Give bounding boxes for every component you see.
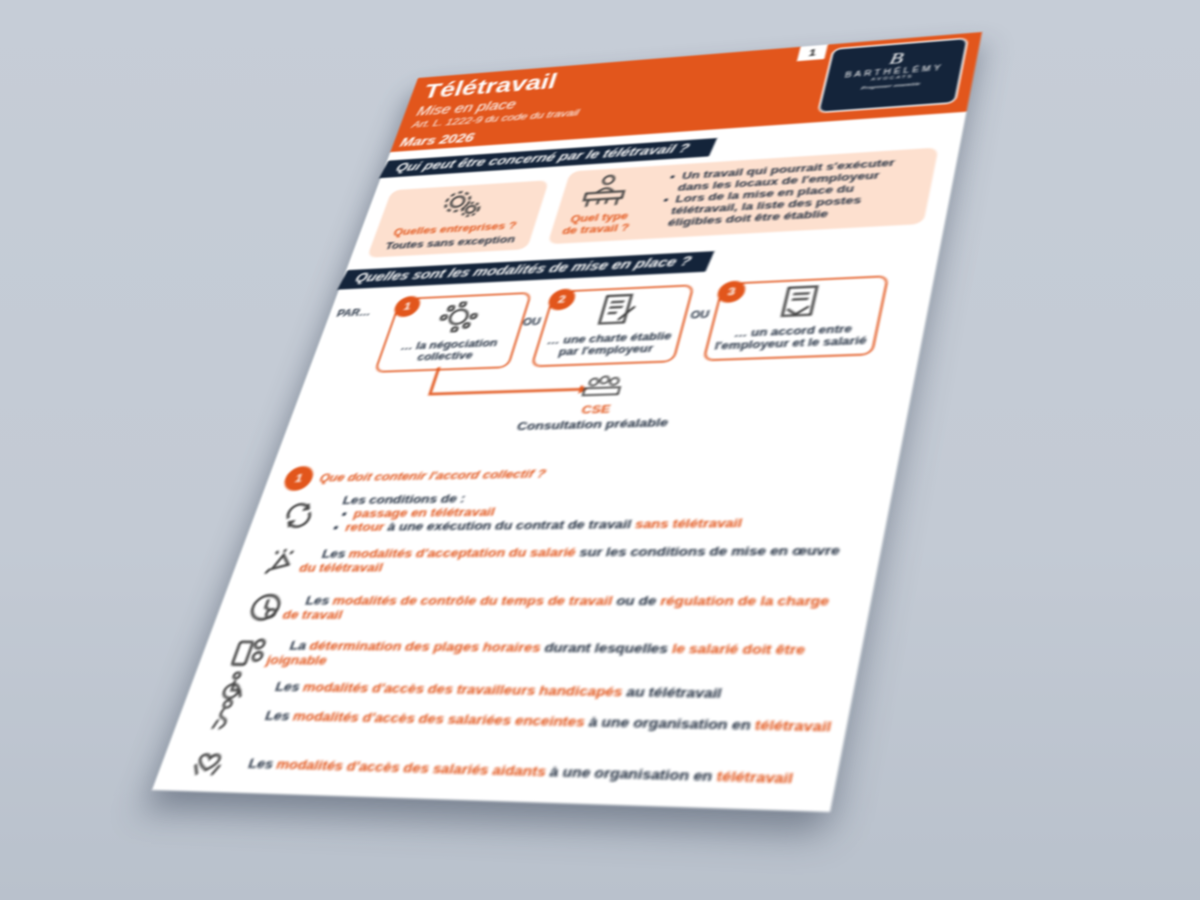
box 1: negociation collective: collective <box>416 349 475 363</box>
item: aidants <box>192 698 795 787</box>
item: conditions <box>284 491 744 534</box>
label: OU 1: OU <box>521 316 542 328</box>
logo <box>817 37 969 113</box>
icon: CSE group <box>580 374 623 398</box>
box 2: charte employeur <box>530 284 695 367</box>
panel: quel type de travail: • Un travail qui pourrait s'exécuter <box>669 156 896 182</box>
box 2: charte employeur: 2 <box>557 293 567 305</box>
logo: Progresser ensemble <box>860 81 921 91</box>
section heading: accord collectif: 1 <box>293 471 305 485</box>
section heading: accord collectif: Que doit contenir l'accord collectif ? <box>318 467 548 484</box>
item: plages horaires: La détermination des plages horaires durant lesquelles le salarié doit être joignable <box>264 638 807 668</box>
panel: quelles entreprises: Quelles entreprises ? <box>392 219 518 238</box>
section heading: accord collectif <box>282 464 548 492</box>
box 1: negociation collective: 1 <box>402 300 413 312</box>
subtitle: Mise en place <box>415 97 518 119</box>
heading bar: modalites: Quelles sont les modalités de mise en place ? <box>352 255 694 285</box>
item: enceintes: Les modalités d'accès des salariées enceintes à une organisation en télétravail <box>263 708 833 735</box>
date: Mars 2026 <box>398 131 476 149</box>
panel: quel type de travail: télétravail, la liste des postes <box>670 194 863 217</box>
legal reference: Art. L. 1222-9 du code du travail <box>411 107 581 130</box>
label: OU 2: OU <box>689 308 711 321</box>
panel: quelles entreprises: Toutes sans exception <box>384 233 517 252</box>
icon: gears <box>442 190 482 218</box>
panel: quelles entreprises <box>367 180 549 258</box>
box 1: negociation collective <box>374 292 532 373</box>
CSE label: Consultation préalable <box>515 416 670 433</box>
page number tab: 1 <box>808 47 817 58</box>
logo: BARTHÉLÉMY <box>844 64 944 80</box>
item: enceintes <box>210 698 834 735</box>
CSE label: CSE <box>580 402 612 416</box>
CSE label <box>515 402 670 433</box>
panel: quel type de travail: • Lors de la mise en place du <box>662 182 856 206</box>
arrow: connector to CSE <box>426 366 588 397</box>
box 3: accord employeur salarie: l'employeur et le salarié <box>713 334 868 352</box>
header band <box>390 32 982 152</box>
item: conditions: • retour à une exécution du contrat de travail sans télétravail <box>331 516 744 534</box>
box 3: accord employeur salarie: … un accord entre <box>733 323 853 340</box>
panel: quel type de travail: Quel type <box>569 210 630 225</box>
box 2: charte employeur: … une charte établie <box>546 330 673 347</box>
panel: quel type de travail: dans les locaux de l'employeur <box>676 169 881 193</box>
item: handicapes <box>220 670 724 701</box>
box 1: negociation collective: … la négociation <box>399 337 499 352</box>
page number tab <box>797 45 828 61</box>
document page <box>152 32 982 812</box>
logo: B <box>888 48 906 68</box>
box 3: accord employeur salarie: 3 <box>726 285 737 298</box>
panel: quel type de travail: éligibles doit être établie <box>667 207 830 228</box>
panel: quel type de travail <box>547 147 939 244</box>
item: handicapes: Les modalités d'accès des travailleurs handicapés au télétravail <box>273 679 723 701</box>
icon: worker at desk <box>581 174 627 208</box>
logo: AVOCATS <box>871 74 914 82</box>
box 2: charte employeur: par l'employeur <box>557 343 654 358</box>
heading bar: qui peut etre concerne: Qui peut être concerné par le télétravail ? <box>393 142 692 174</box>
item: acceptation: Les modalités d'acceptation du salarié sur les conditions de mise en œuvre du télétravail <box>297 543 841 575</box>
box 3: accord employeur salarie <box>702 275 889 361</box>
label: PAR: PAR… <box>335 307 373 319</box>
title: Télétravail <box>420 70 560 103</box>
panel: quel type de travail: de travail ? <box>561 221 631 237</box>
item: controle temps: Les modalités de contrôle du temps de travail ou de régulation de la charge de travail <box>280 593 831 622</box>
item: conditions: • passage en télétravail <box>340 505 497 520</box>
item: conditions: Les conditions de : <box>341 491 467 507</box>
item: aidants: Les modalités d'accès des salariés aidants à une organisation en télétravail <box>246 755 795 787</box>
